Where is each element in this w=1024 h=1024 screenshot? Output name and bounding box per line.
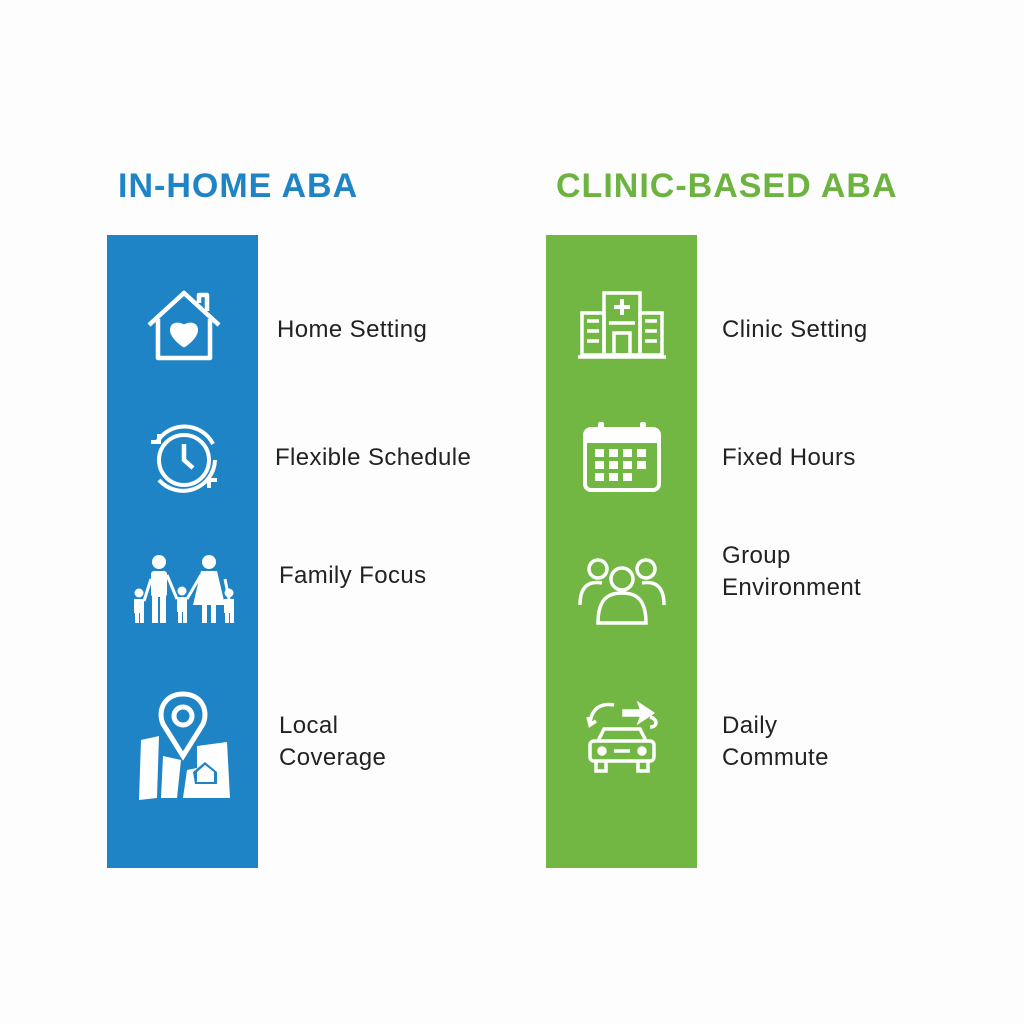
label: daily commute <box>722 712 829 771</box>
label: clinic setting: Clinic Setting <box>722 316 868 343</box>
label: home setting: Home Setting <box>277 316 427 343</box>
icon: home heart <box>148 290 220 360</box>
icon: clock <box>151 424 217 493</box>
label: daily commute: Commute <box>722 744 829 771</box>
icon: hospital <box>578 291 666 359</box>
icon: map pin <box>139 692 230 800</box>
title: clinic: CLINIC-BASED ABA <box>556 167 898 205</box>
label: group environment: Group <box>722 542 791 569</box>
label: local coverage <box>279 712 386 771</box>
label: daily commute: Daily <box>722 712 777 739</box>
title: in-home: IN-HOME ABA <box>118 167 358 205</box>
icon: car <box>586 700 658 773</box>
label: group environment <box>722 542 861 601</box>
label: local coverage: Local <box>279 712 338 739</box>
icon: calendar <box>583 422 661 492</box>
label: family focus: Family Focus <box>279 562 426 589</box>
panel: in-home bar <box>107 235 258 868</box>
label: flexible schedule: Flexible Schedule <box>275 444 471 471</box>
icon: group <box>578 558 666 625</box>
label: group environment: Environment <box>722 574 861 601</box>
icon: family <box>134 555 234 623</box>
label: fixed hours: Fixed Hours <box>722 444 856 471</box>
panel: clinic bar <box>546 235 697 868</box>
label: local coverage: Coverage <box>279 744 386 771</box>
